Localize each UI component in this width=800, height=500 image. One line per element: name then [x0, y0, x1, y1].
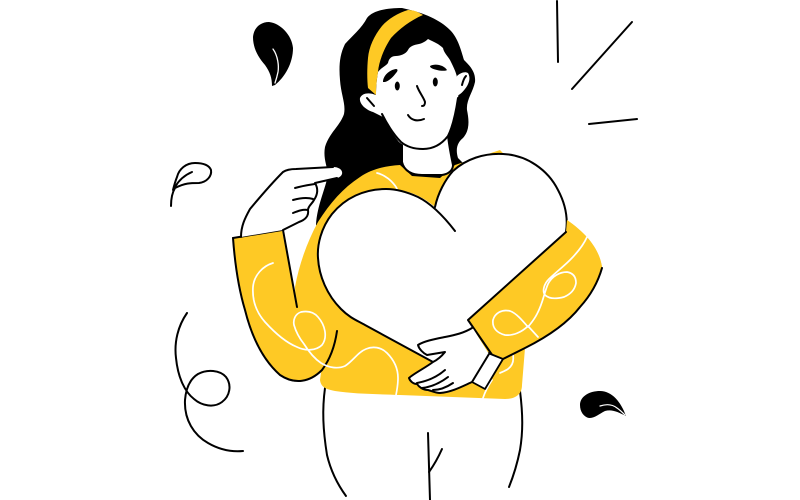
mouth	[408, 115, 424, 120]
head skin	[376, 39, 458, 149]
right eye	[433, 78, 438, 86]
left ear detail	[367, 98, 374, 106]
cuff	[472, 353, 503, 389]
hand outline	[409, 328, 489, 393]
pants	[323, 388, 522, 500]
icon: black leaf top left	[253, 22, 293, 86]
left ear	[360, 93, 385, 118]
right sleeve	[467, 220, 602, 362]
right ear	[457, 72, 469, 96]
headband	[367, 10, 423, 95]
left sleeve	[233, 230, 337, 381]
neck	[402, 130, 453, 175]
left eyebrow	[383, 69, 398, 82]
icon: outlined leaf left	[171, 163, 211, 206]
sparkle rays top right	[557, 1, 637, 124]
icon: black leaf bottom right	[580, 391, 626, 418]
nose	[417, 86, 425, 106]
pointing hand	[241, 167, 342, 237]
finger line three	[433, 383, 453, 390]
finger line one	[417, 370, 445, 383]
face	[360, 39, 469, 149]
hair	[316, 8, 475, 240]
left eye	[395, 82, 400, 90]
holding hand and cuff	[409, 327, 503, 393]
finger line two	[422, 377, 448, 388]
right eyebrow	[430, 65, 447, 71]
sweater body	[295, 150, 602, 399]
jaw line	[382, 98, 458, 149]
decorative curl line left	[175, 313, 243, 451]
heart	[318, 154, 567, 362]
right ear detail	[462, 76, 466, 85]
sweater pattern lines	[253, 173, 513, 398]
hand	[409, 327, 489, 393]
